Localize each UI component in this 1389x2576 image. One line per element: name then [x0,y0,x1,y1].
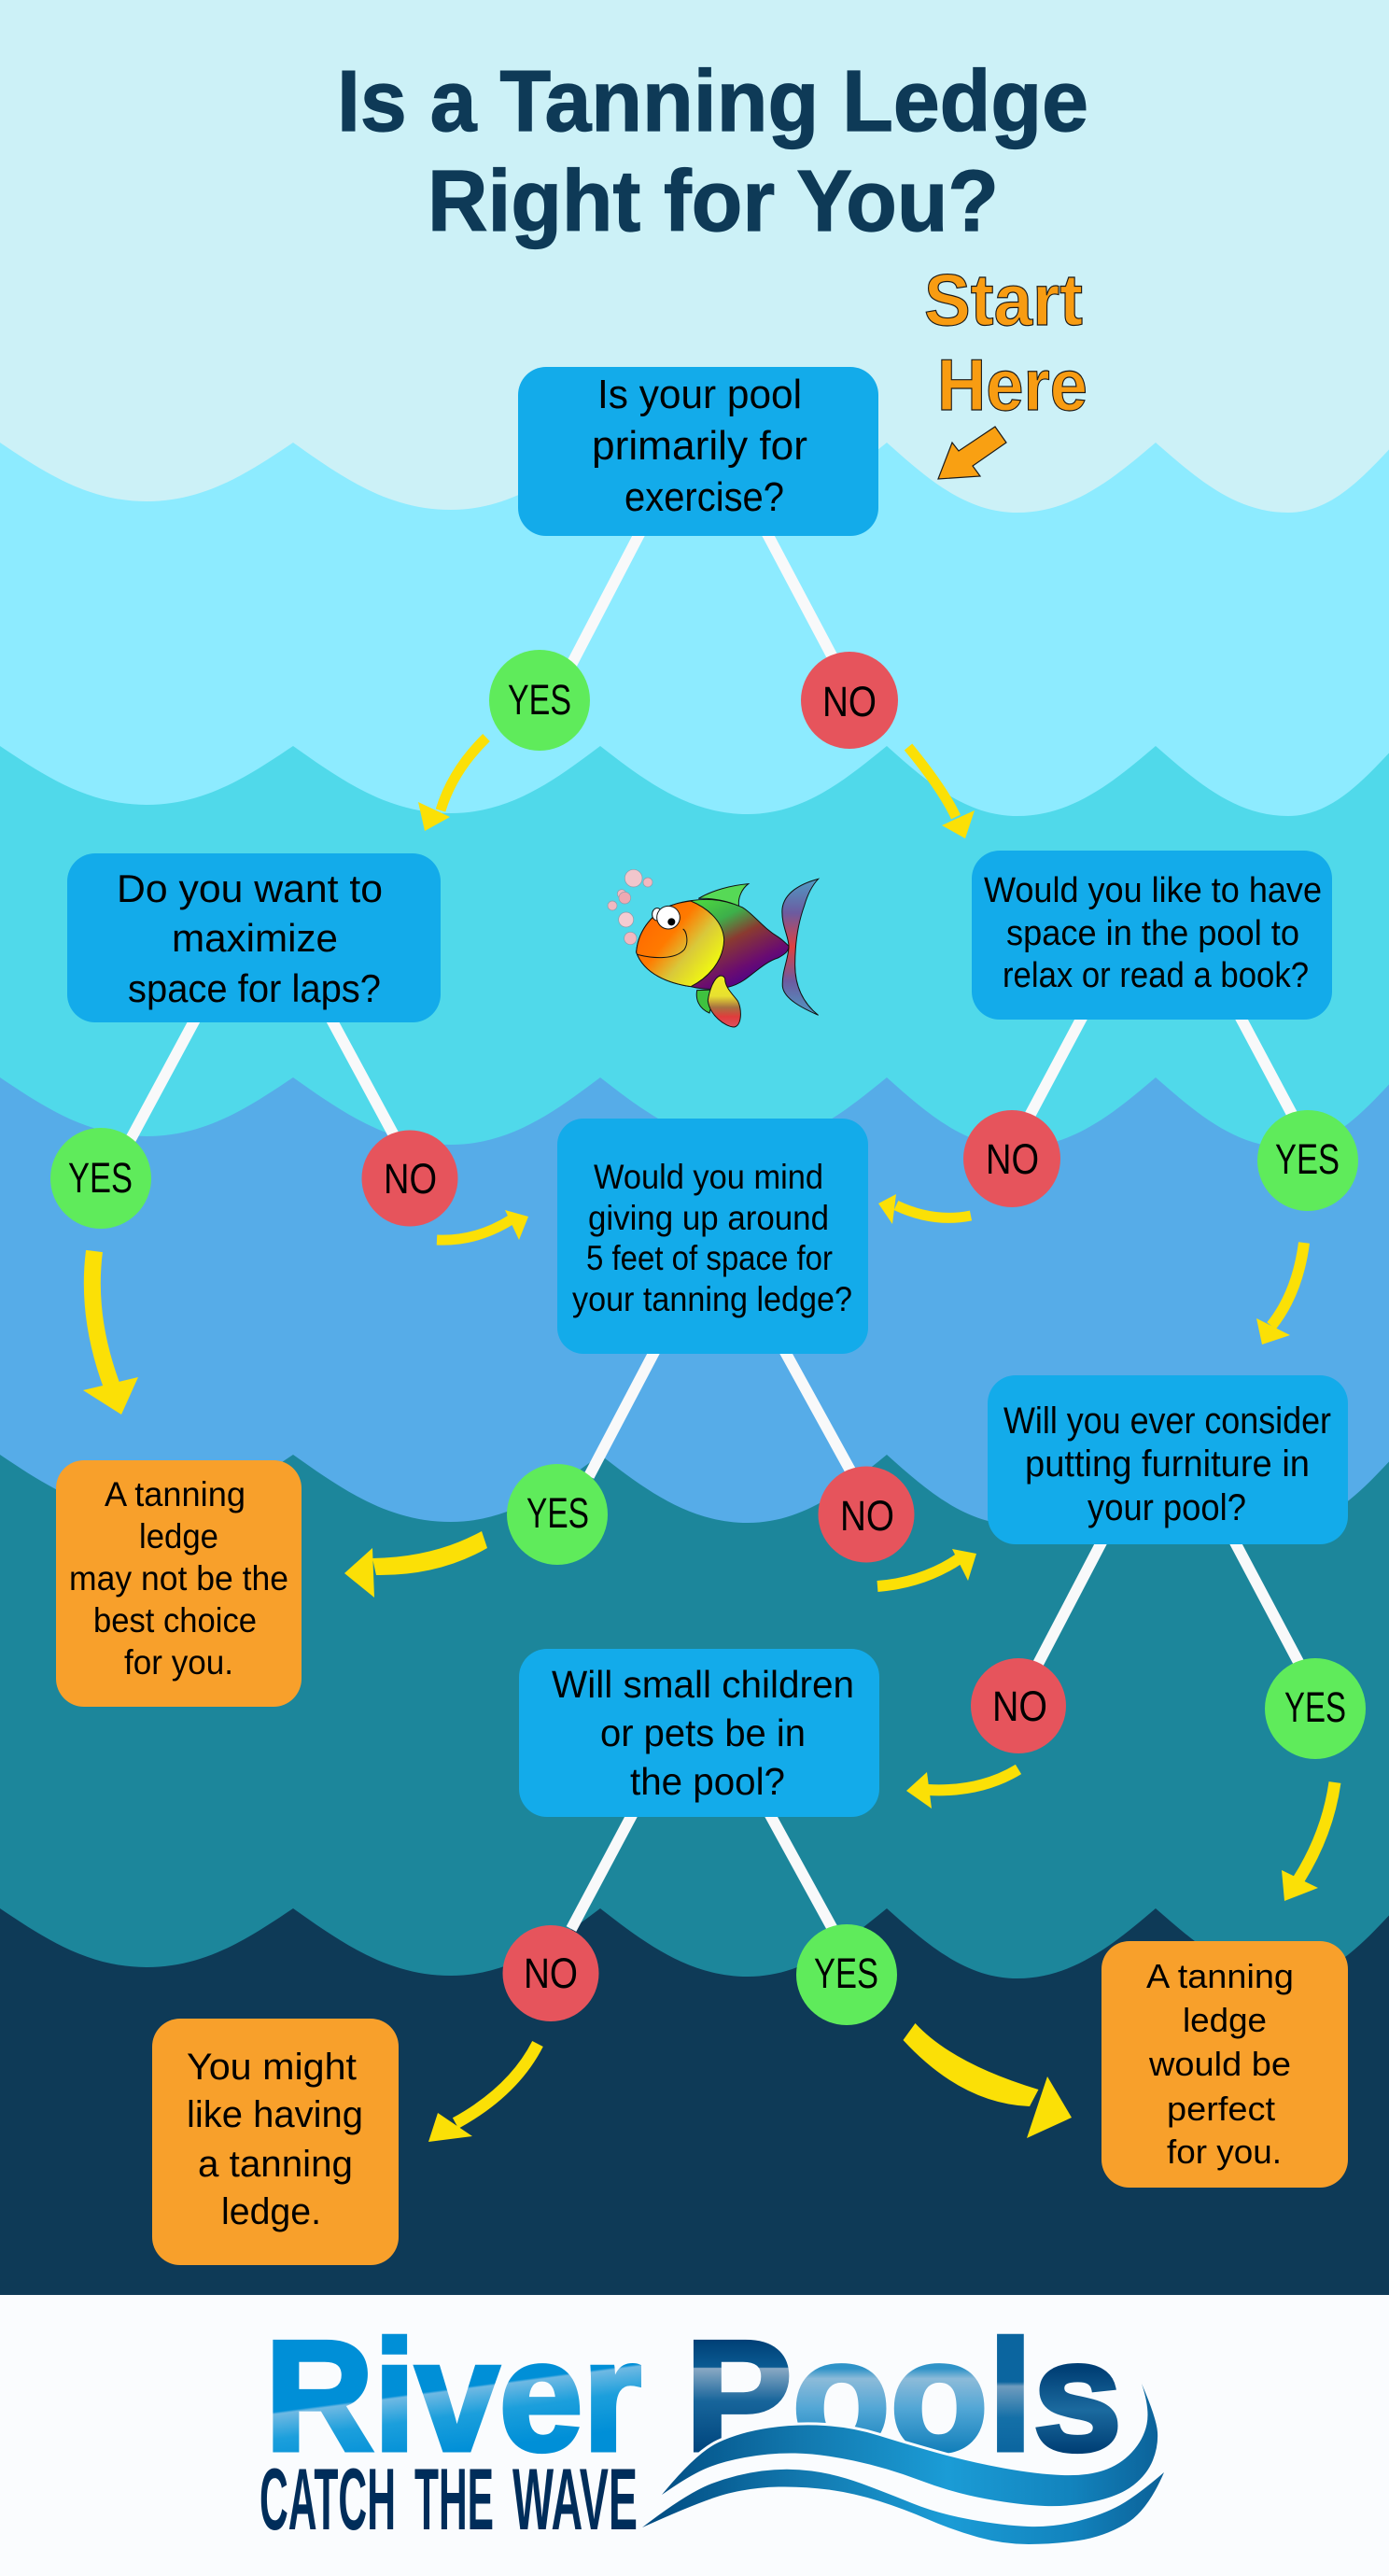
logo: River Pools, catch the wave: River [265,2308,641,2484]
panel: question, relax or read [972,851,1332,1020]
footer band [0,2295,1389,2576]
panel: question, small children or pets: or pets be in [600,1711,806,1754]
panel: question, give up 5 feet: your tanning ledge? [572,1280,852,1318]
arrow: yes to perfect for you [1282,1782,1335,1901]
panel: question, pool for exercise: primarily for [592,423,807,469]
panel: result, perfect for you: would be [1148,2045,1291,2083]
panel: question, relax or read: space in the pool to [1006,914,1299,953]
panel: result, may not be best choice: A tanning [105,1474,246,1513]
badge: no, furniture [971,1658,1066,1753]
badge: yes, relax or read: YES [1275,1135,1340,1183]
panel: question, small children or pets: the pool? [630,1760,785,1803]
badge: yes, small children: YES [814,1950,878,1997]
panel: question, small children or pets: Will small children [552,1663,854,1706]
panel: result, perfect for you: perfect [1167,2090,1275,2128]
arrow: yes to maximize laps [418,738,486,831]
logo: River Pools, catch the wave: CATCH [260,2450,396,2548]
logo: River Pools, catch the wave: THE [414,2450,494,2548]
panel: result, you might like: ledge. [221,2191,321,2232]
panel: question, small children or pets [519,1649,879,1817]
title [337,52,1088,249]
arrow: no to might like [428,2044,538,2142]
panel: question, give up 5 feet: giving up around [588,1199,829,1237]
icon: rainbow fish with bubbles [608,869,819,1027]
arrow: yes to furniture [1256,1243,1304,1344]
badge: yes, exercise: YES [508,676,571,724]
panel: question, furniture [988,1375,1348,1544]
panel: question, pool for exercise: exercise? [624,474,784,520]
arrow: no to giving up space [437,1210,528,1240]
badge: yes, exercise [489,650,590,751]
badge: no, small children [502,1925,599,2021]
panel: question, give up 5 feet [557,1119,868,1354]
panel: question, furniture: your pool? [1087,1487,1246,1528]
panel: result, perfect for you [1101,1941,1348,2188]
panel: question, give up 5 feet: Would you mind [594,1158,823,1196]
badge: yes, give up 5 feet: YES [526,1489,589,1537]
panel: question, give up 5 feet: 5 feet of space for [586,1239,833,1277]
panel: question, pool for exercise: Is your pool [597,372,802,417]
logo: River Pools, catch the wave: WAVE [512,2450,638,2548]
badge: yes, furniture: YES [1284,1683,1346,1731]
title: Is a Tanning Ledge [337,52,1088,149]
badge: no, give up 5 feet [818,1466,915,1563]
panel: question, furniture: putting furniture in [1025,1443,1310,1485]
panel: result, you might like [152,2019,399,2265]
arrow: yes to may not be best [344,1531,487,1598]
panel: question, relax or read: Would you like to have [984,871,1322,910]
arrow: no to small children [906,1769,1018,1809]
panel: result, may not be best choice: ledge [139,1516,218,1555]
badge: no, small children: NO [524,1950,578,1997]
arrow: yes to may not be best [83,1251,138,1415]
badge: no, maximize laps: NO [384,1155,437,1203]
title: Right for You? [428,152,999,249]
badge: no, exercise: NO [822,678,877,725]
icon: orange start arrow [938,427,1006,479]
connectors: white branch lines [131,532,1299,1929]
panel: result, perfect for you: ledge [1183,2001,1267,2039]
logo: River Pools, catch the wave [260,2308,1164,2548]
panel: result, you might like: a tanning [198,2144,353,2185]
panel: question, maximize laps: Do you want to [117,866,383,910]
panel: question, relax or read: relax or read a book? [1003,956,1309,995]
arrow: no to relax space [908,747,975,838]
panel: question, maximize laps [67,853,441,1022]
bubbles [608,869,652,945]
panel: question, furniture: Will you ever consider [1003,1401,1331,1442]
badge: yes, maximize laps [50,1128,151,1229]
panel: result, may not be best choice [56,1460,302,1707]
panel: result, may not be best choice: best choice [93,1600,257,1640]
panel: result, may not be best choice: for you. [124,1642,233,1682]
arrow: yes to perfect for you, large [904,2023,1072,2138]
arrow: no to giving up space from right [878,1194,971,1224]
badge: no, relax or read [963,1110,1060,1207]
badge: yes, give up 5 feet [507,1464,608,1565]
badge: no, relax or read: NO [986,1135,1039,1183]
badge: yes, relax or read [1257,1110,1358,1211]
badge: no, exercise [801,652,898,749]
badge: no, give up 5 feet: NO [840,1492,894,1540]
panel: result, perfect for you: for you. [1167,2133,1282,2171]
panel: result, perfect for you: A tanning [1146,1957,1294,1995]
badge: yes, maximize laps: YES [68,1154,133,1202]
start here label: Here [937,344,1087,426]
arrow: no to furniture [877,1549,976,1586]
panel: result, you might like: like having [187,2094,363,2135]
panel: question, pool for exercise [518,367,878,536]
panel: question, maximize laps: space for laps? [128,966,381,1010]
panel: result, you might like: You might [187,2047,357,2088]
logo: River Pools, catch the wave: Pools [685,2308,1122,2484]
badge: no, furniture: NO [992,1682,1047,1730]
badge: yes, furniture [1265,1658,1366,1759]
badge: no, maximize laps [362,1130,457,1227]
badge: yes, small children [796,1924,897,2025]
panel: question, maximize laps: maximize [172,916,338,960]
start here label: Start [924,259,1083,341]
start here label [924,259,1087,426]
panel: result, may not be best choice: may not be the [69,1558,288,1598]
